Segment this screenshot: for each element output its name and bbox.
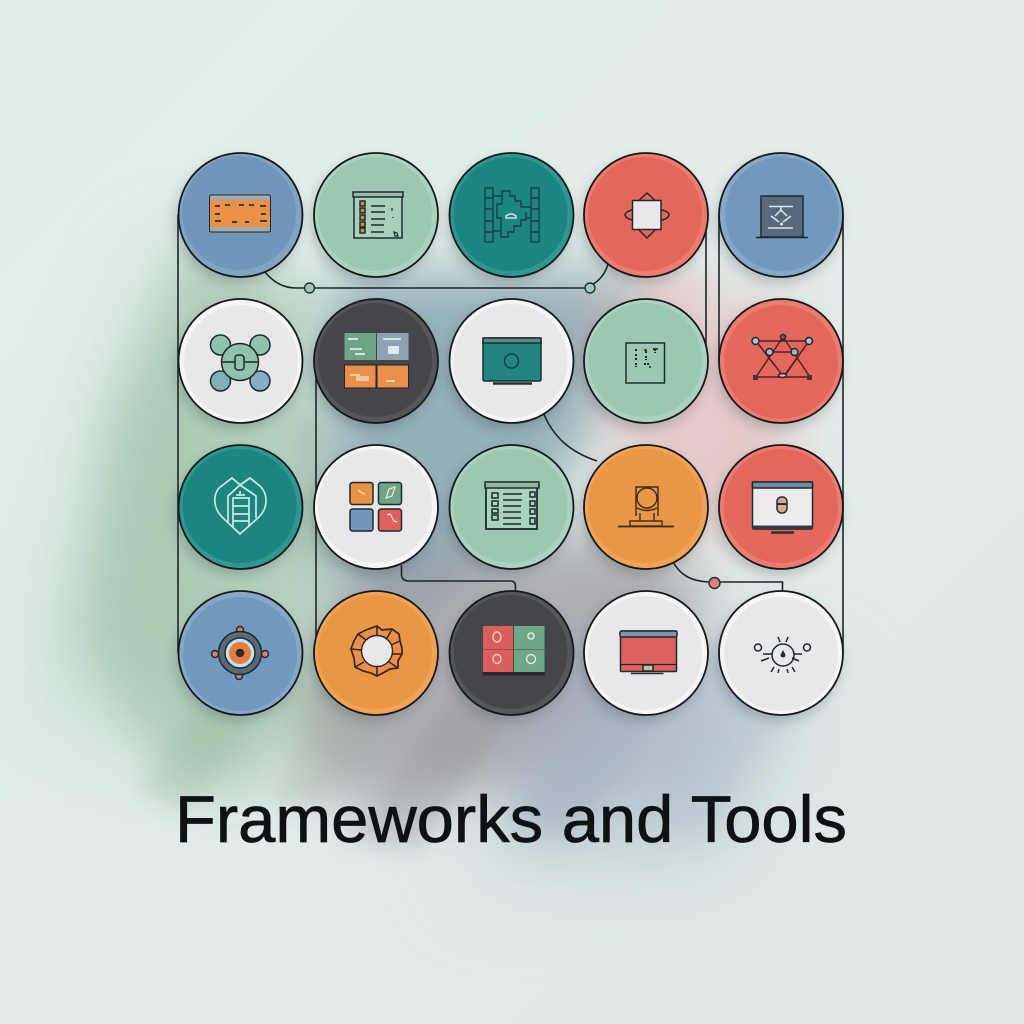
disc: white color grid bbox=[314, 445, 438, 569]
icon: orange window bbox=[210, 195, 270, 232]
icon: gear ring bbox=[351, 626, 402, 676]
icon: kiosk stand bbox=[618, 487, 674, 526]
connector node: bottom right bbox=[709, 578, 720, 588]
disc: red square bbox=[584, 153, 708, 277]
icon: square with code glyphs bbox=[626, 343, 664, 383]
icon: network star bbox=[752, 334, 812, 380]
disc: blue laptop bbox=[719, 153, 843, 277]
disc: dark tile grid bbox=[450, 591, 574, 715]
disc: dark dashboard bbox=[314, 299, 438, 423]
icon: maze bbox=[485, 188, 539, 242]
icon: square with diamond bbox=[625, 193, 669, 238]
icon: list window large bbox=[485, 482, 539, 529]
disc: white sun bbox=[719, 591, 843, 715]
icon: shield with ladder bbox=[215, 478, 266, 534]
disc: blue target bbox=[178, 591, 302, 715]
icon: concentric target bbox=[212, 626, 268, 680]
disc: teal shield bbox=[178, 445, 302, 569]
disc: orange kiosk bbox=[584, 445, 708, 569]
disc: red network star bbox=[719, 299, 843, 423]
soft diagonal shadows bbox=[20, 225, 840, 880]
connector node: top right bbox=[585, 283, 595, 293]
disc: white nodes bbox=[178, 299, 302, 423]
icon: dark slate screen bbox=[756, 196, 808, 238]
icon: list window bbox=[353, 192, 403, 238]
icon: red window bbox=[620, 631, 677, 674]
icon: white monitor bbox=[752, 482, 812, 532]
disc: green code square bbox=[584, 299, 708, 423]
disc: red monitor bbox=[719, 445, 843, 569]
connector node: top left bbox=[304, 283, 314, 293]
disc: blue window bbox=[178, 153, 302, 277]
title: Frameworks and Tools bbox=[175, 782, 847, 856]
icon: teal monitor bbox=[483, 338, 541, 384]
disc: white red window bbox=[584, 591, 708, 715]
disc: orange gear bbox=[314, 591, 438, 715]
icon: node cluster bbox=[210, 335, 270, 391]
icon: four colored tiles bbox=[350, 482, 402, 531]
icon: four panel dashboard bbox=[344, 333, 408, 388]
disc: green list bbox=[314, 153, 438, 277]
connector lines bbox=[178, 215, 843, 653]
icon: sun with nodes bbox=[754, 637, 810, 673]
disc: white monitor bbox=[450, 299, 574, 423]
disc: green list large bbox=[450, 445, 574, 569]
icon: red and green tiles bbox=[483, 626, 545, 676]
disc: teal maze bbox=[450, 153, 574, 277]
